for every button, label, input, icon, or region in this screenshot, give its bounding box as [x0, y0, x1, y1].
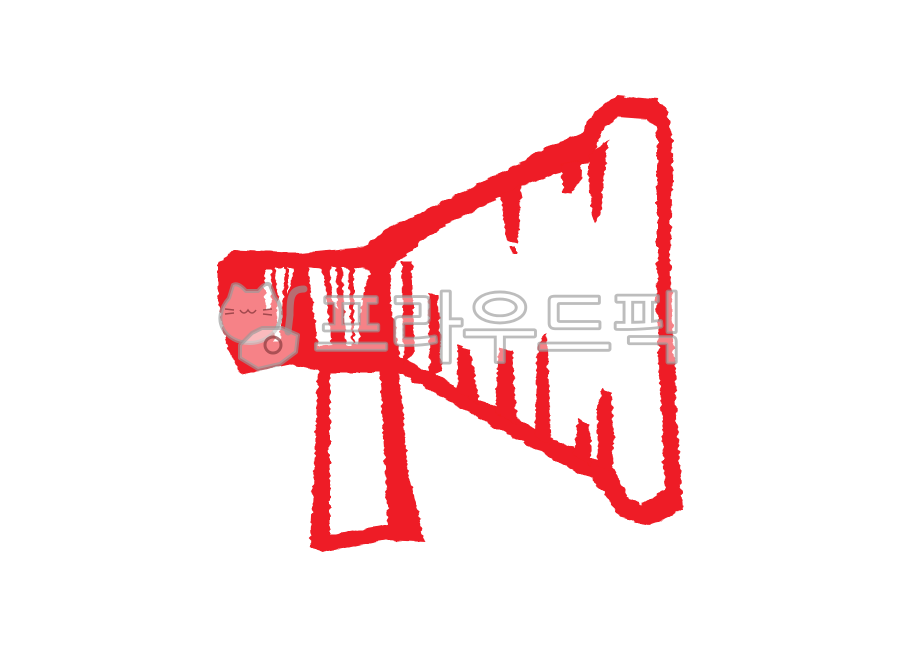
watermark: brand text: 프라우드픽	[314, 291, 686, 367]
megaphone top drips and lower ribs	[402, 140, 614, 472]
camera	[240, 328, 298, 369]
cat face	[225, 309, 272, 315]
tail	[288, 289, 304, 332]
watermark: cat with camera	[220, 284, 304, 369]
cat head	[220, 284, 281, 343]
rear chamber slits	[264, 266, 370, 346]
megaphone silhouette	[218, 95, 683, 553]
icon: red megaphone	[218, 95, 683, 553]
